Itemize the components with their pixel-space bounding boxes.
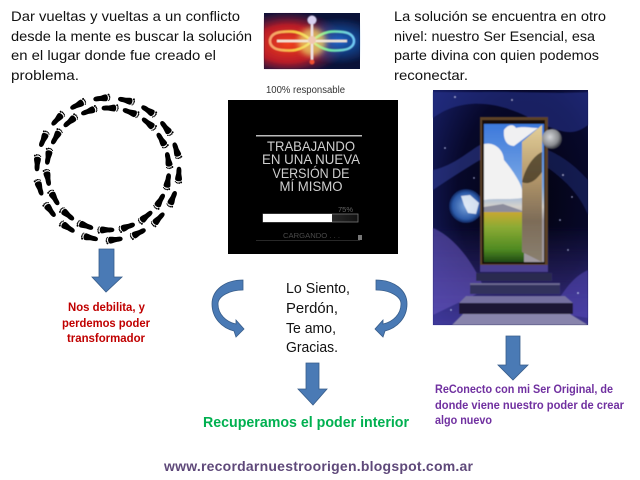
heading: recover inner power: Recuperamos el poder interior (203, 414, 409, 431)
text block: reconnect: ReConecto con mi Ser Original, de (435, 384, 613, 396)
panel: loading screen: CARGANDO . . . (283, 233, 340, 240)
text block: Hooponopono phrases: Gracias. (286, 340, 338, 356)
icon: ring of footprints (33, 94, 183, 244)
text block: reconnect (435, 384, 624, 427)
text block: Hooponopono phrases: Lo Siento, (286, 281, 350, 297)
planet: earth (449, 189, 483, 223)
door frame (480, 117, 548, 265)
panel: loading screen (228, 100, 398, 254)
text block: weakens (62, 302, 151, 345)
text block: reconnect: donde viene nuestro poder de crear (435, 400, 624, 412)
arrow: down center (298, 363, 327, 405)
loading heading (262, 138, 361, 194)
text block: left intro: problema. (11, 67, 79, 83)
text block: weakens: transformador (67, 333, 146, 345)
progress bar (263, 214, 358, 222)
text block: Hooponopono phrases (286, 281, 350, 356)
door panel (522, 125, 542, 262)
text block: left intro (11, 8, 252, 83)
panel: loading screen: 75% (338, 207, 353, 214)
footer: website url: www.recordarnuestroorigen.blogspot.com.ar (163, 458, 474, 474)
text block: left intro: en el lugar donde fue creado el (11, 47, 216, 63)
text block: left intro: Dar vueltas y vueltas a un conflicto (11, 8, 240, 24)
arrow: curved left (212, 280, 244, 337)
text block: Hooponopono phrases: Perdón, (286, 301, 338, 317)
text block: left intro: desde la mente es buscar la solución (11, 28, 252, 44)
loading heading: MÍ MISMO (280, 178, 343, 194)
moon (542, 129, 562, 149)
image: infinity symbol on cosmic background (264, 13, 360, 69)
loading heading: VERSIÓN DE (272, 165, 350, 181)
text block: right intro: parte divina con quien podemos (394, 47, 599, 63)
loading heading: EN UNA NUEVA (262, 151, 361, 167)
arrow: down left (92, 249, 122, 292)
text block: right intro (394, 8, 606, 83)
text block: Hooponopono phrases: Te amo, (286, 321, 336, 337)
caption: 100% responsable: 100% responsable (266, 85, 345, 96)
text block: weakens: perdemos poder (62, 318, 151, 330)
stairs (452, 265, 588, 325)
image: open door in space (433, 90, 588, 325)
stars (444, 96, 579, 311)
arrow: down right (498, 336, 528, 380)
loading heading: TRABAJANDO (267, 138, 355, 154)
sky and field (484, 124, 544, 262)
text block: right intro: nivel: nuestro Ser Esencial, esa (394, 28, 595, 44)
arrow: curved right (375, 280, 407, 337)
text block: right intro: reconectar. (394, 67, 468, 83)
text block: reconnect: algo nuevo (435, 415, 492, 427)
text block: right intro: La solución se encuentra en otro (394, 8, 606, 24)
text block: weakens: Nos debilita, y (68, 302, 146, 314)
